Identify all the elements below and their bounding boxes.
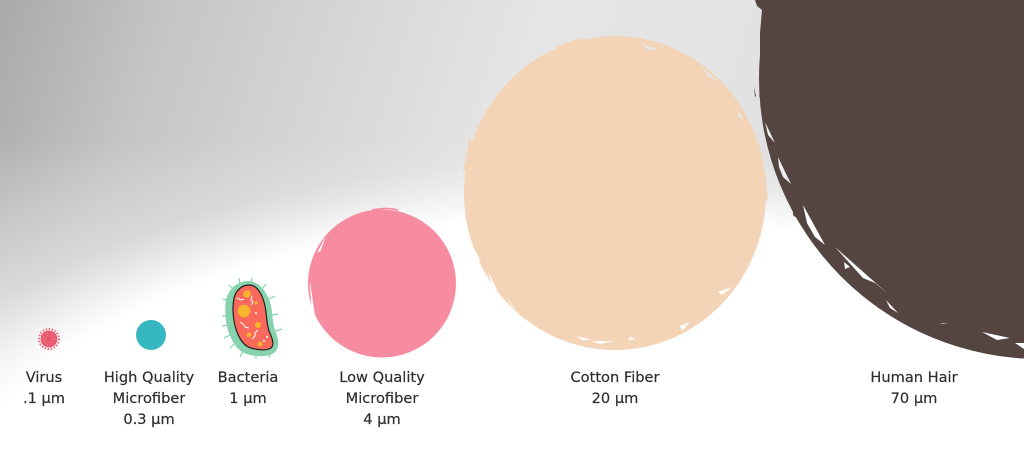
circle: human hair (754, 0, 1024, 359)
label: cotton fiber: 20 µm (592, 390, 638, 407)
label: low quality microfiber: Low Quality (339, 369, 425, 386)
label: high quality microfiber: Microfiber (113, 390, 185, 407)
label: cotton fiber: Cotton Fiber (570, 369, 660, 386)
label: bacteria: 1 µm (229, 390, 267, 407)
label: high quality microfiber: 0.3 µm (123, 411, 175, 428)
label: low quality microfiber: 4 µm (363, 411, 401, 428)
label: low quality microfiber (339, 369, 425, 428)
label: bacteria (218, 369, 278, 407)
label: virus: Virus (26, 369, 62, 386)
label: low quality microfiber: Microfiber (346, 390, 418, 407)
label: virus: .1 µm (23, 390, 65, 407)
label: virus (23, 369, 65, 407)
label: human hair (870, 369, 958, 407)
label: high quality microfiber (104, 369, 194, 428)
circle: low quality microfiber (308, 208, 456, 358)
label: cotton fiber (570, 369, 660, 407)
label: human hair: Human Hair (870, 369, 958, 386)
label: bacteria: Bacteria (218, 369, 278, 386)
label: human hair: 70 µm (891, 390, 937, 407)
circle: high quality microfiber (136, 320, 166, 350)
icon: bacteria (222, 278, 282, 359)
icon: virus (39, 329, 59, 349)
label: high quality microfiber: High Quality (104, 369, 194, 386)
circle: cotton fiber (463, 36, 768, 350)
